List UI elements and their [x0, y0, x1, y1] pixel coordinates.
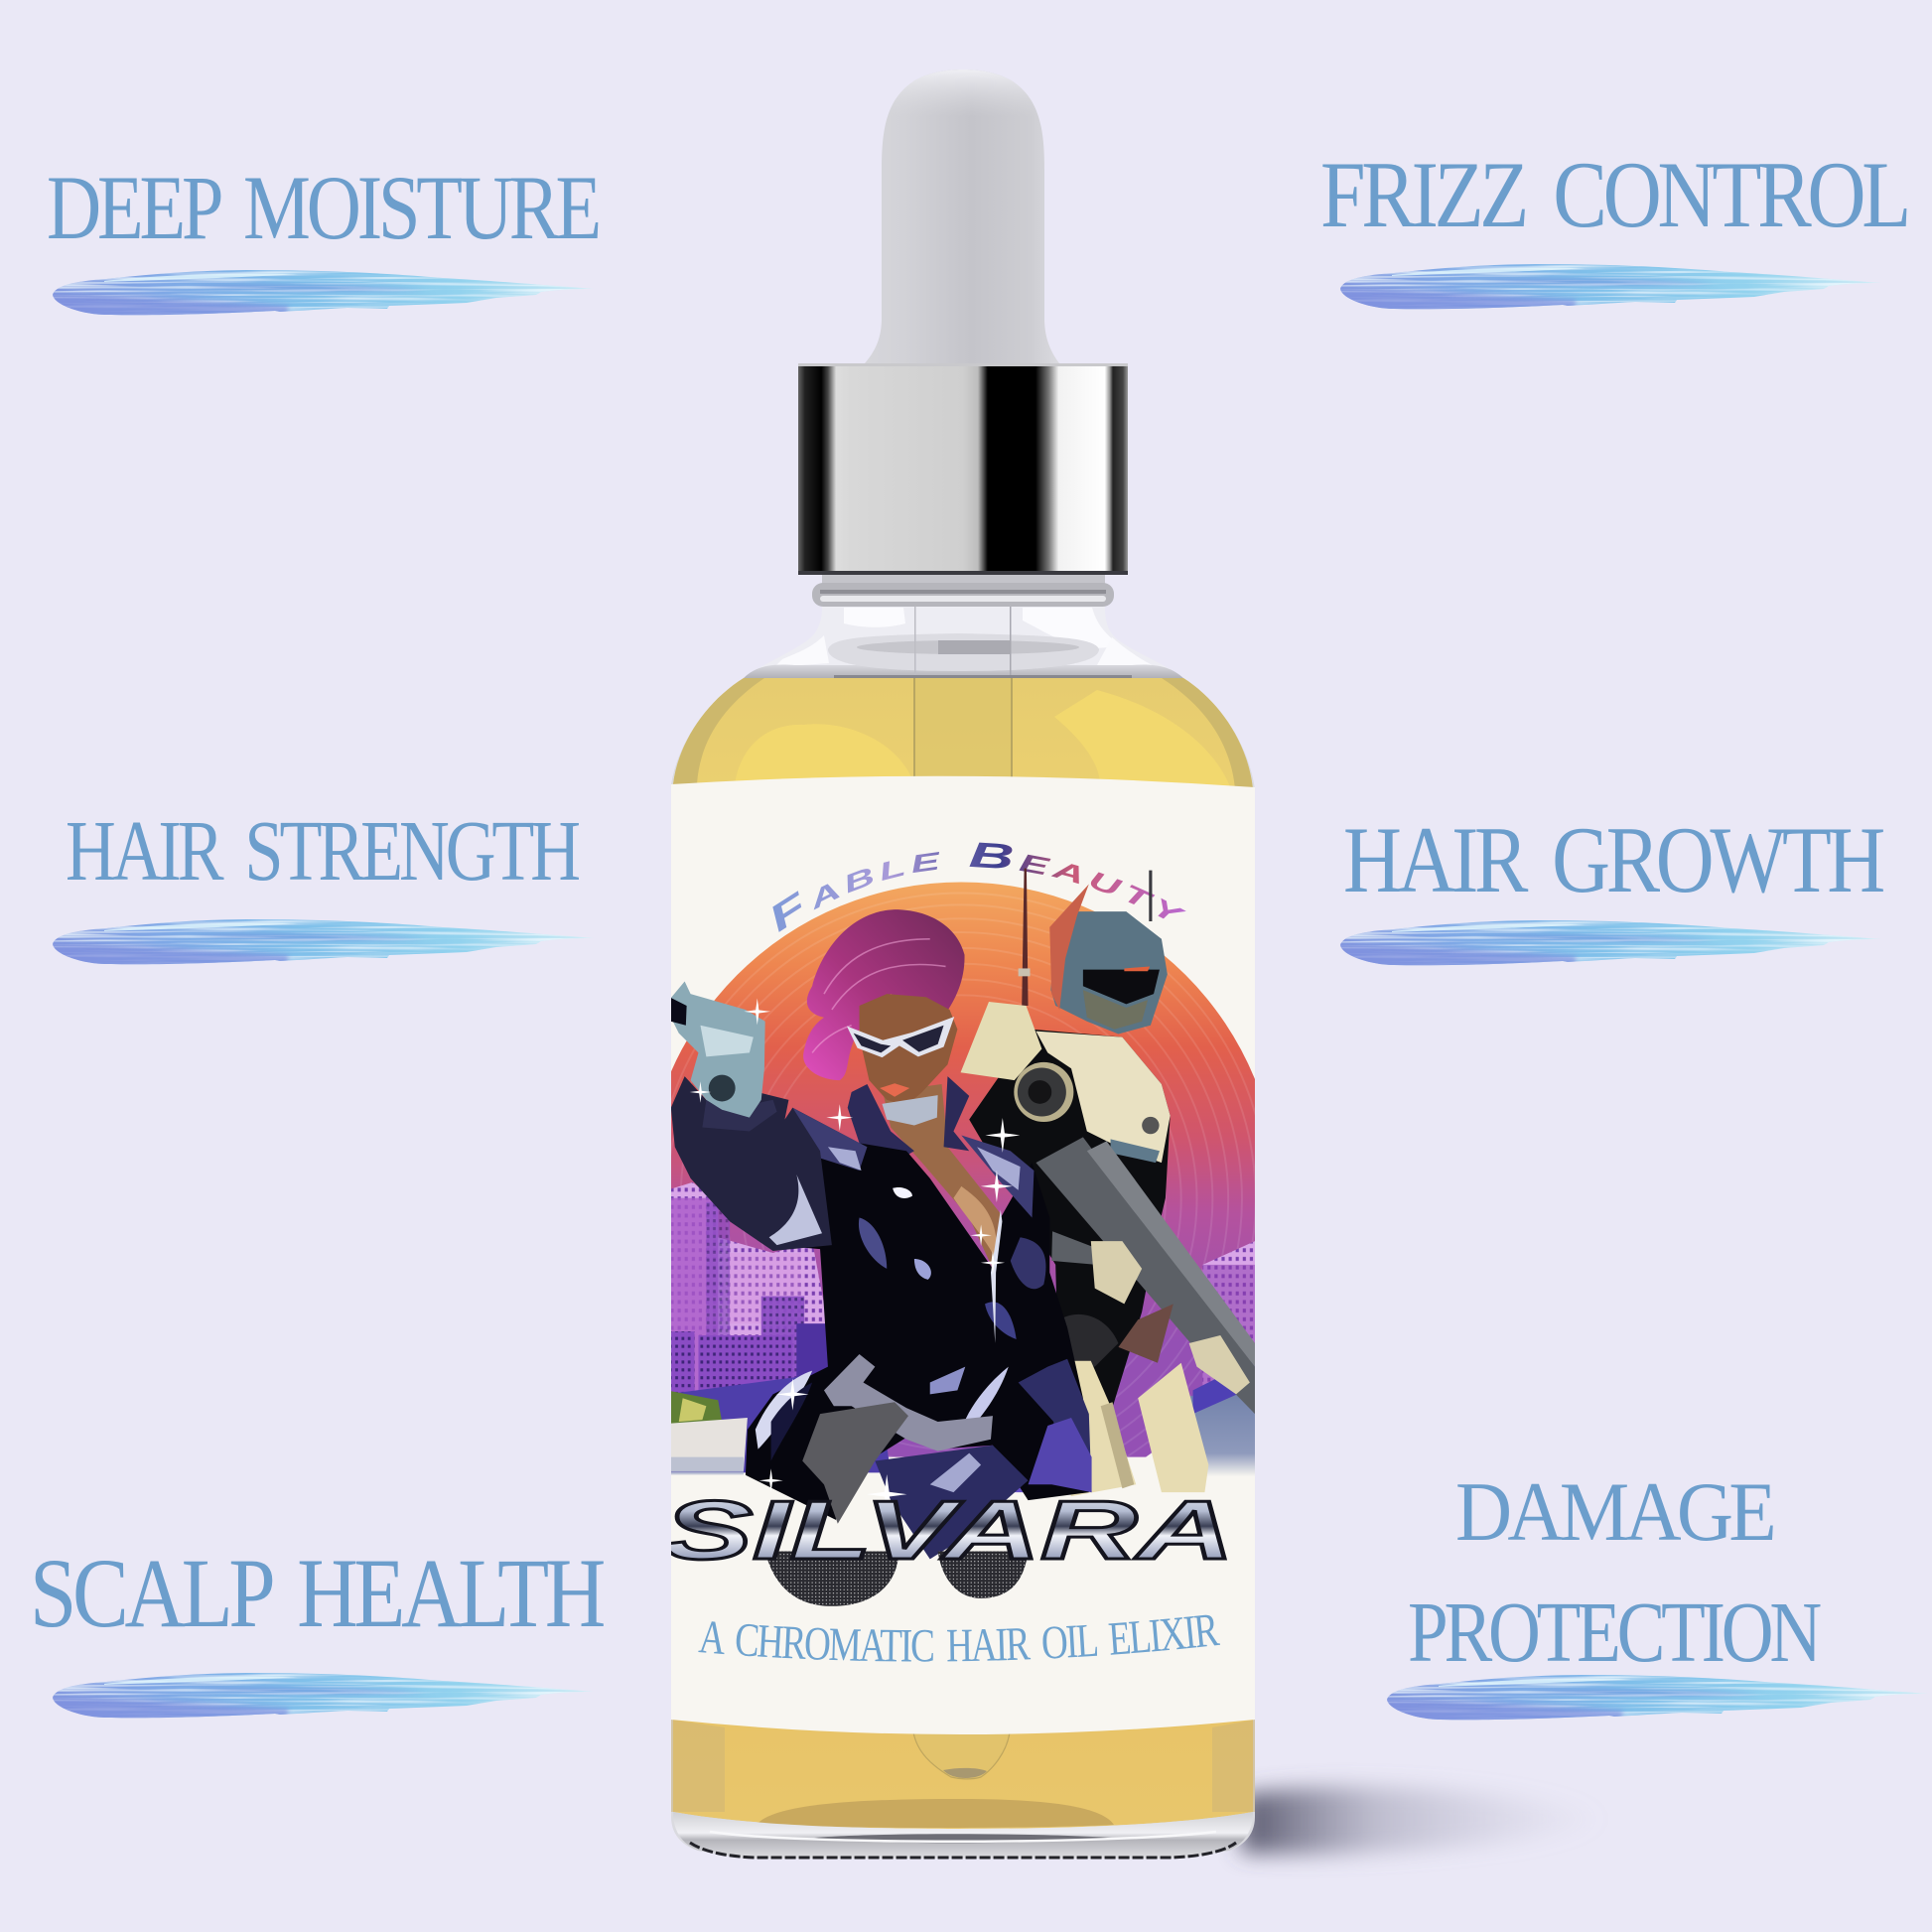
- feature: Hair Strength: [50, 802, 594, 967]
- product bottle: [671, 574, 1255, 1859]
- hair: [803, 909, 965, 1080]
- sparkles: [690, 998, 1128, 1561]
- feature: Damage Protection: [1384, 1465, 1928, 1723]
- sunglasses: [847, 1017, 954, 1057]
- neck glass: [744, 606, 1183, 678]
- label artwork: background scene: [671, 882, 1255, 1493]
- feature: Hair Strength: HAIR STRENGTH: [66, 802, 580, 898]
- bottle shadow: [1241, 1787, 1604, 1855]
- glass base: [673, 1812, 1253, 1859]
- feature: Frizz Control: [1320, 142, 1907, 312]
- tagline: A CHROMATIC HAIR OIL ELIXIR: [698, 1614, 1220, 1662]
- feature: Damage Protection: PROTECTION: [1408, 1584, 1821, 1680]
- robot companion: [961, 869, 1255, 1496]
- feature: Deep Moisture: [47, 157, 599, 318]
- glass body: [671, 678, 1255, 1859]
- heroine: [671, 909, 1092, 1559]
- face: [860, 994, 957, 1106]
- feature: Hair Growth: [1337, 807, 1883, 968]
- brand arc: Fable Beauty: Fable Beauty: [772, 842, 1186, 932]
- feature: Scalp Health: [30, 1538, 604, 1721]
- feature: Deep Moisture: DEEP MOISTURE: [47, 157, 599, 258]
- suit collar: [848, 1076, 969, 1163]
- lips: [880, 1083, 909, 1097]
- thigh highlight: [756, 1371, 812, 1449]
- choker: [882, 1095, 938, 1126]
- suit torso: [734, 1108, 1089, 1520]
- pistol: [671, 981, 765, 1118]
- dropper rubber bulb: [865, 69, 1059, 363]
- neck lip: [822, 574, 1105, 584]
- feature: Damage Protection: DAMAGE: [1455, 1465, 1773, 1559]
- tube drop: [913, 1732, 1010, 1779]
- feature: Scalp Health: SCALP HEALTH: [30, 1538, 604, 1648]
- sun disc: [671, 882, 1255, 1457]
- belt: [824, 1354, 993, 1451]
- metal collar: [798, 363, 1128, 575]
- label panel: [671, 776, 1255, 1734]
- neck and chest: [883, 1084, 1001, 1269]
- silvara logo halftone: [765, 1551, 1029, 1606]
- label artwork: figures: [671, 869, 1255, 1606]
- lower suit: [875, 1446, 1029, 1559]
- city skyline: [667, 1182, 1255, 1430]
- holster: [802, 1402, 908, 1524]
- tagline: [698, 1614, 1220, 1662]
- oil: [673, 678, 1253, 1829]
- logo: SILVARA: SILVARA: [663, 1483, 1234, 1577]
- ground and bush: [671, 1364, 1255, 1511]
- left arm and glove: [671, 1076, 832, 1251]
- right arm: [1019, 1359, 1092, 1492]
